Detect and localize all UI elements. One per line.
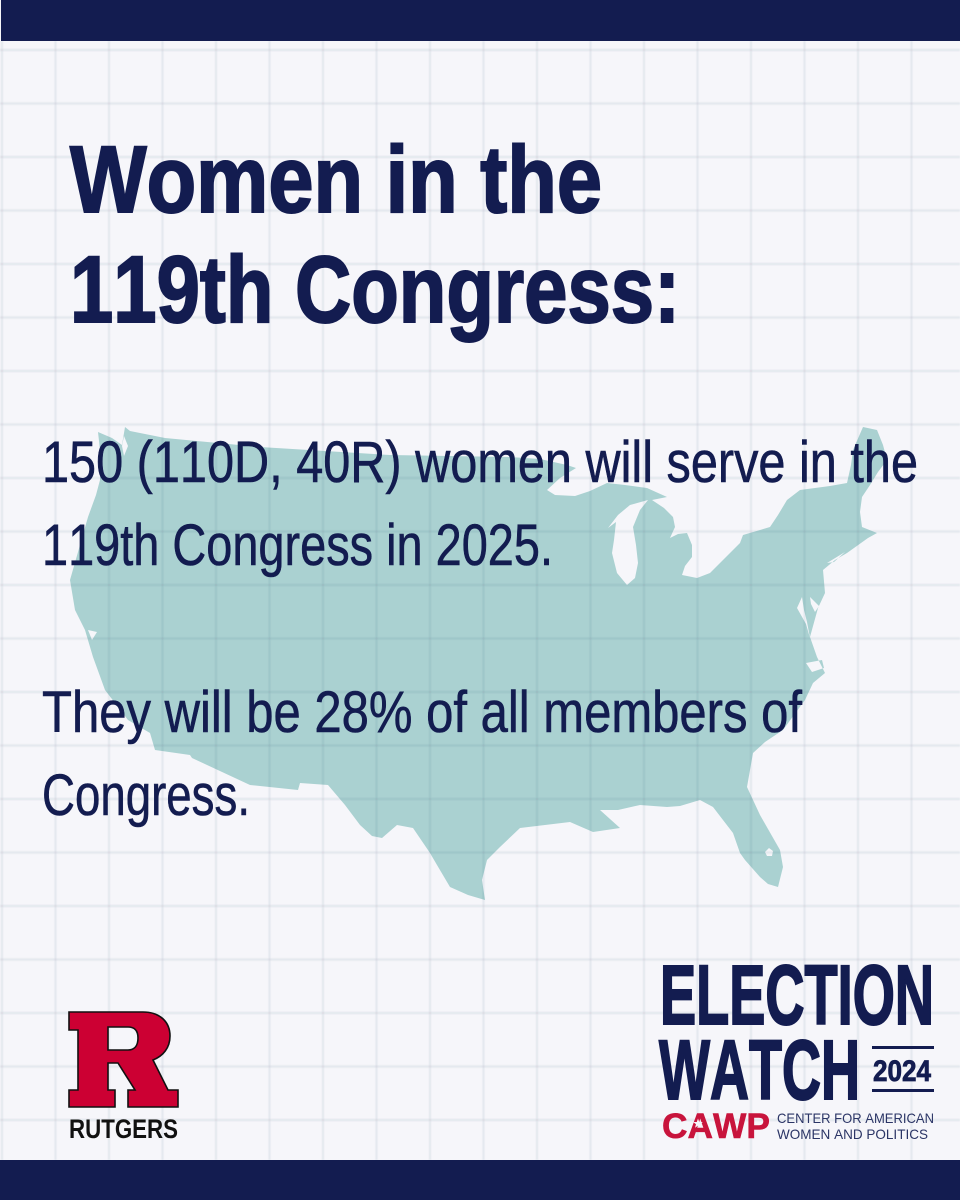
body text [42, 430, 918, 828]
Election Watch 2024 logo [659, 948, 934, 1117]
title: 119th Congress: [70, 237, 680, 343]
wordmark: Rutgers: RUTGERS [69, 1114, 178, 1144]
top navy bar [1, 0, 960, 41]
body text: 119th Congress in 2025. [42, 513, 553, 578]
Rutgers logo [69, 1012, 178, 1144]
icon: Rutgers R [69, 1012, 178, 1107]
CAWP logo [662, 1107, 934, 1146]
year badge [872, 1046, 934, 1092]
icon: star [693, 1118, 703, 1128]
bottom navy bar [0, 1160, 960, 1200]
organisation name: CENTER FOR AMERICAN [777, 1110, 934, 1126]
organisation name: WOMEN AND POLITICS [777, 1126, 928, 1142]
wordmark: CAWP: CAWP [662, 1107, 770, 1146]
map of the United States [70, 427, 887, 900]
title: Women in the [70, 127, 602, 233]
body text: They will be 28% of all members of [42, 680, 803, 745]
body text: Congress. [42, 763, 250, 828]
year badge: 2024 [873, 1055, 931, 1088]
organisation name [777, 1110, 934, 1142]
title [70, 127, 680, 343]
